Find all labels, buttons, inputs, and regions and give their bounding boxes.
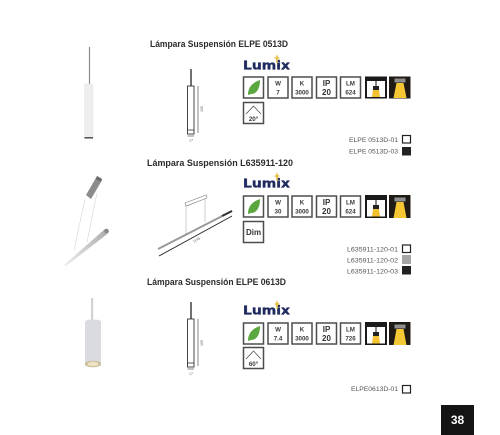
icon: lumens: 726 bbox=[345, 336, 356, 342]
icon: kelvin bbox=[292, 77, 312, 98]
icon: pendant lamp bbox=[365, 322, 387, 345]
icon: IP: 20 bbox=[322, 334, 331, 343]
icon: watts: W bbox=[275, 200, 281, 206]
icon: IP bbox=[316, 77, 336, 98]
icon: kelvin: K bbox=[300, 80, 305, 88]
icon: dimmable bbox=[244, 222, 264, 242]
icon: pendant lamp bbox=[365, 195, 387, 218]
technical drawing: L635911-120 bbox=[158, 195, 232, 256]
icon: watts: 30 bbox=[275, 208, 282, 216]
icon: IP: 20 bbox=[322, 207, 331, 216]
icon: lumens bbox=[340, 77, 360, 98]
icon: kelvin: K bbox=[300, 326, 305, 334]
icon: IP bbox=[316, 196, 336, 217]
icon: IP bbox=[316, 323, 336, 344]
technical drawing: L635911-120: 1145 bbox=[192, 237, 201, 244]
technical drawing: ELPE 0513D: 105 bbox=[200, 106, 204, 112]
icon: lumens: LM bbox=[346, 200, 355, 206]
technical drawing: ELPE 0513D: 17 bbox=[189, 138, 193, 142]
icon: beam angle 60 bbox=[244, 348, 264, 368]
icon: kelvin bbox=[292, 196, 312, 217]
icon: leaf bbox=[244, 323, 264, 344]
icon row: ELPE 0513D bbox=[244, 76, 410, 124]
icon: lumens: LM bbox=[346, 326, 355, 334]
page number badge bbox=[441, 405, 474, 435]
logo: Lumix: Lumix bbox=[243, 176, 290, 190]
icon: light beam bbox=[389, 76, 410, 98]
technical drawing: ELPE 0613D: 17 bbox=[189, 372, 193, 376]
variant codes: ELPE 0513D: ELPE 0513D-01 bbox=[349, 137, 399, 144]
icon: IP: IP bbox=[323, 79, 331, 88]
icon: lumens bbox=[340, 196, 360, 217]
icon: watts: W bbox=[275, 326, 281, 334]
icon: watts: 7 bbox=[276, 90, 280, 96]
icon: beam angle 60: 60° bbox=[249, 361, 259, 368]
page number badge: 38 bbox=[451, 413, 464, 427]
variant codes: L635911-120: L635911-120-02 bbox=[347, 258, 399, 264]
variant codes: ELPE 0513D: ELPE 0513D-03 bbox=[349, 148, 399, 156]
icon: lumens bbox=[340, 323, 360, 344]
icon: kelvin: K bbox=[300, 200, 305, 206]
variant codes: L635911-120: L635911-120-03 bbox=[347, 268, 399, 276]
icon: kelvin bbox=[292, 323, 312, 344]
icon: watts: 7.4 bbox=[274, 336, 283, 342]
variant code: ELPE0613D-01 bbox=[351, 386, 410, 393]
icon: kelvin: 3000 bbox=[295, 208, 309, 216]
technical drawing: ELPE 0613D: 105 bbox=[200, 340, 204, 346]
heading: L635911-120: Lámpara Suspensión L635911-120 bbox=[147, 158, 293, 168]
icon: light beam bbox=[389, 322, 410, 345]
icon: lumens: LM bbox=[346, 80, 355, 88]
product photo: linear pendant bbox=[64, 176, 109, 266]
icon: kelvin: 3000 bbox=[295, 90, 309, 96]
product photo: white cylinder pendant bbox=[85, 298, 101, 367]
heading: ELPE 0513D: Lámpara Suspensión ELPE 0513D bbox=[150, 39, 288, 49]
icon: lumens: 624 bbox=[345, 208, 356, 216]
icon: watts bbox=[268, 323, 288, 344]
icon: watts bbox=[268, 77, 288, 98]
icon: watts bbox=[268, 196, 288, 217]
icon: light beam bbox=[389, 195, 410, 218]
icon row: L635911-120 bbox=[244, 195, 410, 242]
product photo: white slim pendant bbox=[84, 47, 93, 139]
variant codes: ELPE 0513D bbox=[349, 136, 411, 156]
technical drawing: ELPE 0513D bbox=[188, 69, 204, 142]
icon: beam angle 20: 20° bbox=[249, 116, 259, 123]
icon: leaf bbox=[244, 196, 264, 217]
variant codes: L635911-120: L635911-120-01 bbox=[347, 246, 399, 254]
icon: watts: W bbox=[275, 80, 281, 88]
technical drawing: ELPE 0613D bbox=[188, 302, 204, 376]
icon: kelvin: 3000 bbox=[295, 336, 309, 342]
icon: IP: IP bbox=[323, 325, 331, 334]
icon: IP: 20 bbox=[322, 88, 331, 97]
icon: dimmable: Dim bbox=[246, 228, 261, 237]
icon: beam angle 20 bbox=[244, 102, 264, 124]
variant code: ELPE0613D-01: ELPE0613D-01 bbox=[351, 386, 399, 393]
icon: IP: IP bbox=[323, 198, 331, 207]
heading: ELPE 0613D: Lámpara Suspensión ELPE 0613D bbox=[147, 277, 286, 287]
icon: lumens: 624 bbox=[345, 90, 356, 96]
icon: leaf bbox=[244, 77, 264, 98]
logo: Lumix: Lumix bbox=[243, 302, 290, 318]
icon: pendant lamp bbox=[365, 76, 387, 98]
icon row: ELPE 0613D bbox=[244, 322, 410, 368]
variant codes: L635911-120 bbox=[347, 245, 411, 276]
logo: Lumix: Lumix bbox=[243, 58, 290, 72]
